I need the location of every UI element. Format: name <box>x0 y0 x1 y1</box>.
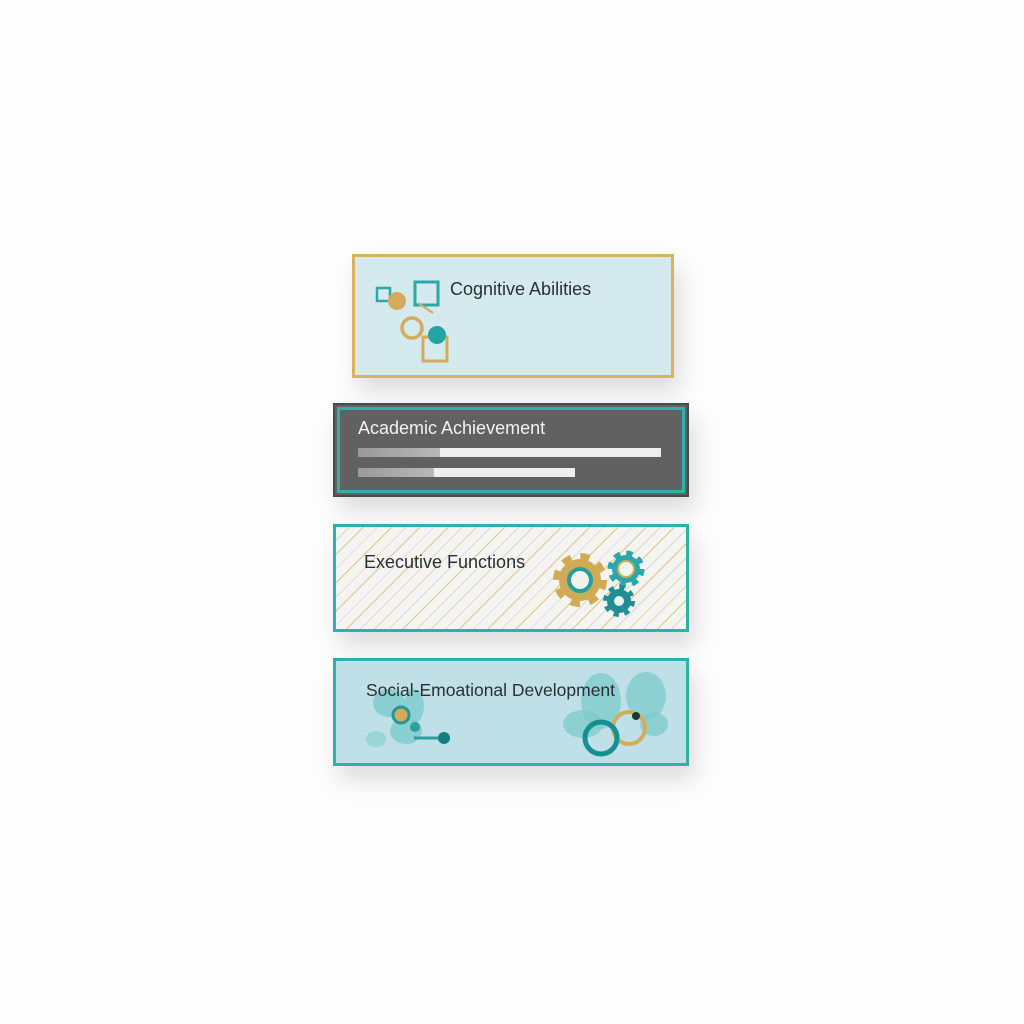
heading: executive functions: Executive Functions <box>364 552 525 572</box>
heading: social-emotional development: Social-Emoational Development <box>366 680 615 700</box>
panel: executive functions <box>333 524 689 632</box>
progress bar 1 <box>358 448 661 457</box>
panel: academic achievement <box>333 403 689 497</box>
icon: geometric shapes <box>376 280 448 362</box>
icon: gears <box>553 550 644 617</box>
heading: academic achievement: Academic Achievement <box>358 418 545 438</box>
heading: cognitive abilities: Cognitive Abilities <box>450 279 591 299</box>
icon: connected blobs left <box>366 689 450 747</box>
progress bar 2 <box>358 468 575 477</box>
panel: social-emotional development <box>333 658 689 766</box>
icon: blobs and rings right <box>563 672 668 756</box>
panel: cognitive abilities <box>352 254 674 378</box>
